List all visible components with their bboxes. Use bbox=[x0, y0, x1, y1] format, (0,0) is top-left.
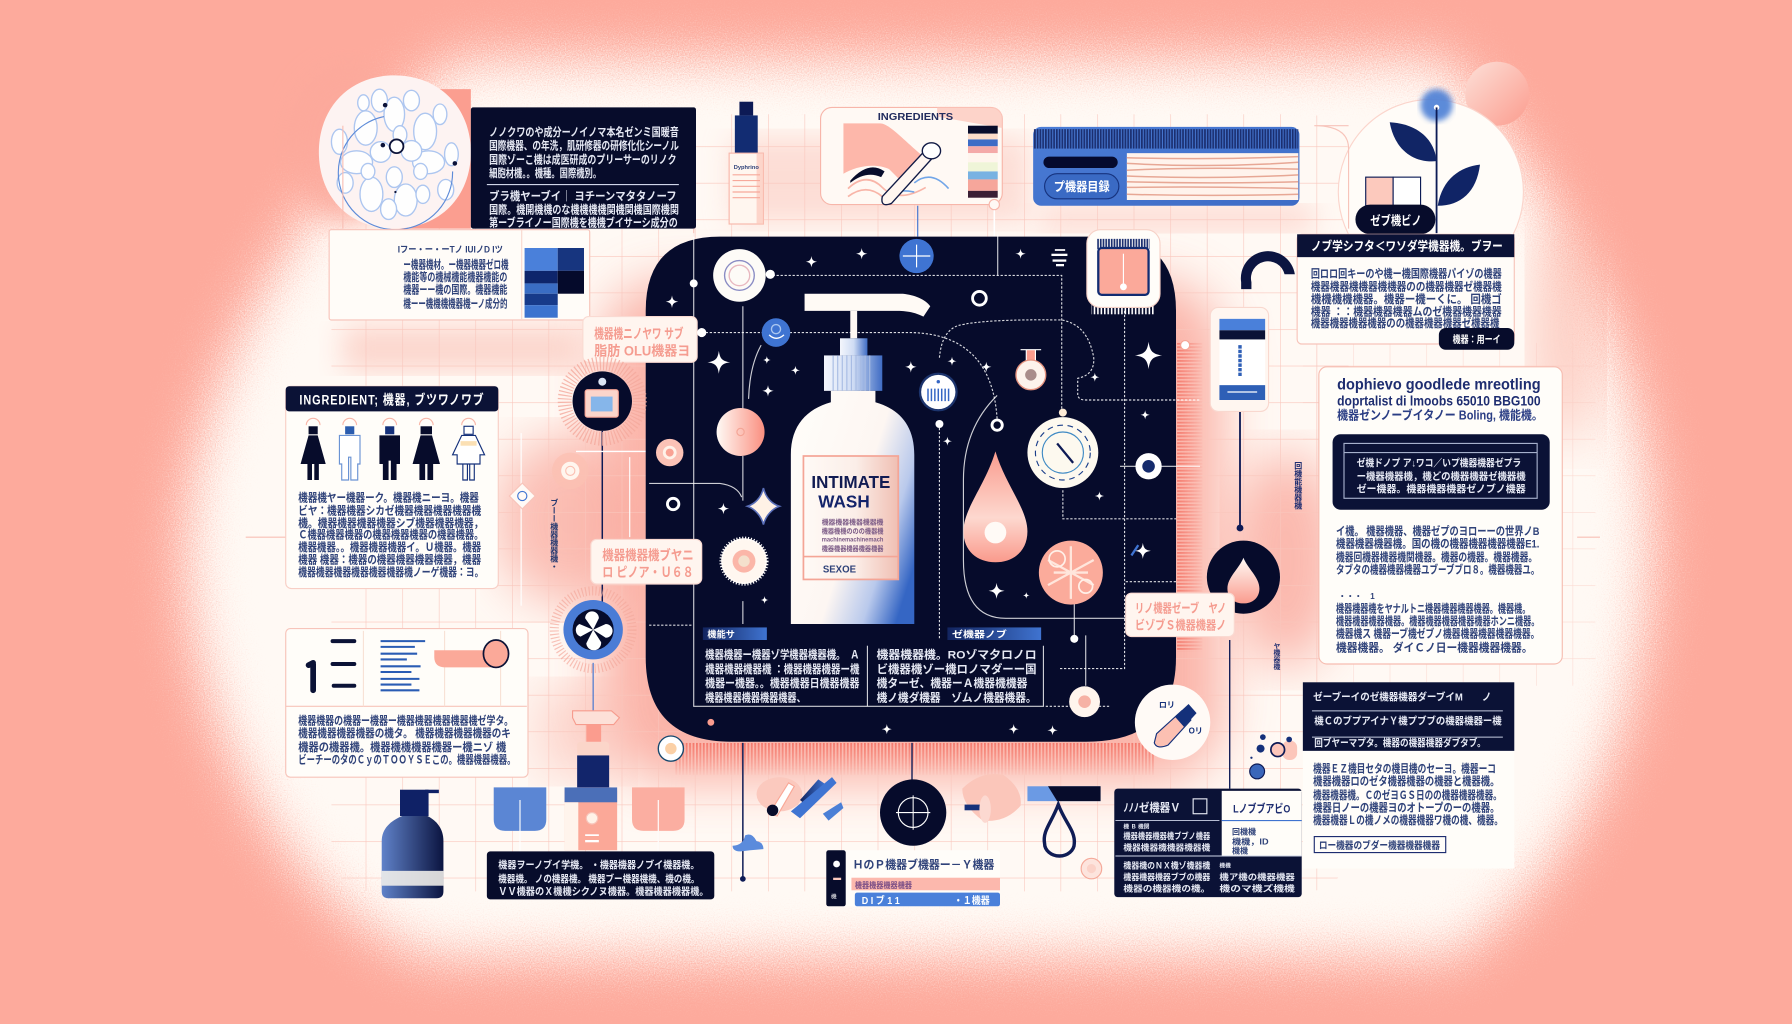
panel: lower left card: 機器機器機器機器の機タ。 機器機器機器機器のキ bbox=[298, 726, 511, 740]
label: right callout: ビゾブＳ機器機器ノ bbox=[1135, 618, 1226, 633]
panel: dark table: 機器の機器機の機。 bbox=[1123, 882, 1210, 893]
wavy lines swatch bbox=[1127, 153, 1298, 200]
dark description box: ブラ機ヤーブイ｜ ヨチーンマタタノーフ bbox=[489, 189, 677, 203]
panel: main right text card: タブタの機器機器機器ユブーブブロ８。機器機器ユ。 bbox=[1336, 563, 1539, 577]
panel: right bottom text card: 機器ＥＺ機目セタの機目機のセーヨ。機器ーコ bbox=[1313, 762, 1496, 776]
icon: blue blob bbox=[733, 834, 763, 851]
left column text: 機能サ bbox=[707, 629, 735, 640]
label: right callout: リノ機器ゼーブ ヤノ bbox=[1135, 601, 1226, 616]
panel: main right text card: 機器ゼンノーブイタノー Boling, 機能機。 bbox=[1337, 407, 1543, 422]
icon: flask bbox=[1016, 350, 1046, 390]
icon: dots cluster bbox=[1250, 734, 1297, 779]
vertical micro labels: ブーー機器機器機・ bbox=[550, 497, 559, 570]
icon: tool circle: Oリ bbox=[1189, 727, 1203, 736]
icon: phone bbox=[1210, 307, 1269, 411]
label: lower left callout: 機器機器機ブヤニ bbox=[602, 547, 694, 563]
outlined button: ロー機器のブダー機器機器機器 bbox=[1319, 839, 1441, 852]
panel: dark table: 機器機のＮＸ機ゾ機器機 bbox=[1123, 860, 1211, 871]
icon: pink cup bbox=[632, 787, 685, 851]
icon: blue checker blocks bbox=[525, 248, 584, 318]
icon: salmon pattern circle bbox=[1039, 541, 1103, 605]
panel: main right text card: 機器機器機器機。国の機の機器機器機器機器E1. bbox=[1336, 536, 1539, 550]
panel: molecule and top description bbox=[319, 75, 696, 230]
outlined button bbox=[1314, 837, 1446, 853]
panel: blue striped card bbox=[1033, 127, 1299, 206]
panel: dark caption bbox=[487, 851, 714, 899]
panel: dark table: 機のマ機ズ機機 bbox=[1219, 882, 1295, 893]
panel: ingredients list: Ｃ機器機器機器の機器機器機器の機器機器。 bbox=[298, 527, 483, 541]
panel: right bottom text card: 回ブヤーマプタ。機器の機器機器ダブタブ。 bbox=[1314, 736, 1486, 749]
left column text bbox=[703, 627, 860, 705]
panel: small stat card: D I ブ 1 1 ・１機器 bbox=[862, 894, 990, 907]
icon: barcode bubble bbox=[919, 373, 958, 411]
connector lines outside the panel bbox=[343, 126, 1349, 878]
icon: pump bottle bbox=[565, 711, 619, 850]
panel: blue squares card bbox=[329, 230, 590, 320]
panel: main right text card: 機器機器機をヤナルトニ機器機器機器機器。機器機。 bbox=[1336, 602, 1530, 616]
panel: right top text card: 機器機器機器機器のの機器機器機器ゼ機器機 bbox=[1311, 316, 1500, 330]
dark description box: 第ーブライノー国際機を機機ブイサーシ成分の bbox=[489, 215, 678, 229]
bottle label: 機器機機ののの機器機 bbox=[822, 527, 884, 536]
label: lower left callout: ロ ピノア・Ｕ６８ bbox=[602, 565, 694, 580]
hatching around main panel bbox=[674, 343, 1202, 775]
label: upper left callout: 機器機ニノヤワ サブ bbox=[594, 325, 684, 341]
panel: ingredients list bbox=[286, 386, 498, 589]
panel: dark table: 機機，ID bbox=[1232, 837, 1269, 847]
bottle label: WASH bbox=[818, 491, 870, 511]
icon: diamond star bbox=[747, 488, 779, 525]
icon: tool circle bbox=[1135, 685, 1210, 760]
panel: right bottom text card: 機器機器ロのゼタ機器機器の機器と機器機。 bbox=[1313, 774, 1499, 788]
icon: fringe circle bbox=[721, 538, 767, 584]
icon: water drop bbox=[963, 451, 1027, 562]
circuit lines bbox=[649, 233, 1200, 706]
dark description box: 細胞材機。。機種。国際機別。 bbox=[489, 166, 601, 180]
panel: dark table: 機機 bbox=[1232, 846, 1248, 856]
panel: main right text card: 機器機器機器機器。機器機器機器機器機器ホンニ機器。 bbox=[1336, 614, 1539, 628]
panel: main right text card: 機器回機器機器機関機器。機器の機器。機器機器。 bbox=[1336, 550, 1537, 564]
dark description box bbox=[471, 107, 696, 229]
panel: right bottom text card bbox=[1303, 682, 1514, 869]
panel: icon tile top right of dark panel bbox=[1087, 230, 1160, 314]
icon: ring bbox=[992, 420, 1002, 430]
panel: right bottom text card: 機器機器機。ＣのゼヨＧＳ日のの機器機器機器。 bbox=[1313, 788, 1502, 802]
right column text: ビ機器機ゾー機ロノマダーー国 bbox=[877, 662, 1037, 676]
panel: right top text card: ノブ学シフタ＜ワソダ学機器機。ブヲー bbox=[1311, 238, 1503, 253]
right column text: 機器機器機。ROゾマ夕ロノロ bbox=[877, 647, 1037, 661]
panel: ingredients list: 機器 機器：機器の機器機器機器機器，機器 bbox=[298, 552, 482, 566]
panel: blue squares card: 機ーー機機機機器機ーノ成分的 bbox=[403, 296, 507, 310]
panel: small stat card: 機器機器機器機器 bbox=[855, 880, 912, 890]
icon: plant bbox=[1366, 89, 1480, 233]
right column text: ゼ機器ノブ bbox=[952, 629, 1007, 640]
panel: blue squares card: Iフー・ー・ーTノ IUIノD Iツ bbox=[398, 245, 503, 255]
panel: dark central panel bbox=[646, 233, 1200, 742]
panel: blue squares card: ー機器機材。ー機器機器ゼロ機 bbox=[403, 258, 509, 272]
icon: blue plus bbox=[899, 239, 934, 273]
dark callout: ゼー機器。機器機器機器ゼノブノ機器 bbox=[1357, 483, 1526, 496]
icon: pink blob bbox=[962, 774, 1021, 823]
color stripe key bbox=[968, 126, 998, 198]
bottle label: SEXOE bbox=[823, 565, 856, 576]
label: upper left callout bbox=[583, 317, 697, 362]
panel: dark caption: 機器機。 ノの機器機。 機器ブー機器機機、機の機。 bbox=[498, 872, 699, 885]
panel: main right text card: doprtalist di lmoobs 65010 BBG100 bbox=[1337, 394, 1541, 409]
icon: salmon sphere bbox=[717, 408, 765, 456]
icon: tool circle: ロリ bbox=[1159, 700, 1175, 709]
icon: small serum bottle: Dyphrino bbox=[734, 165, 759, 171]
panel: right top text card: 機器 ：：機器機器機器ムのゼ機器機器機器 bbox=[1311, 304, 1502, 318]
panel: main right text card: イ機。 機器機器、機器ゼプのヨローーの世界ノB bbox=[1336, 524, 1539, 538]
label: right callout bbox=[1126, 593, 1234, 637]
dark description box: 国際。機開機機のな機機機機関機関機国際機関 bbox=[489, 203, 679, 217]
icon: target dot bbox=[1135, 453, 1162, 479]
icon: arch bbox=[1241, 251, 1295, 289]
panel: ingredients illustration card: INGREDIENTS bbox=[878, 112, 953, 123]
panel: right bottom text card: 機器日ノーの機器ヨのオトープのーの機器。 bbox=[1313, 800, 1499, 814]
panel: right top text card: 機機機機機器。機器ー機ーくに。 回機ゴ bbox=[1311, 292, 1502, 306]
icon: blue lines bbox=[381, 641, 425, 690]
bottle label: 機器機器機器機器機 bbox=[822, 518, 884, 527]
panel: ingredients list: INGREDIENT; 機器, ブツワノワブ bbox=[299, 392, 485, 408]
icon: blue fan circle bbox=[554, 591, 632, 669]
panel: dark table bbox=[1114, 789, 1302, 897]
dark description box: ノノクワのや成分ーノイノマ本名ゼンミ国暖音 bbox=[489, 125, 679, 139]
icon: concentric ring bbox=[713, 249, 766, 302]
panel: ingredients illustration card bbox=[821, 107, 1002, 210]
panel: main right text card: 機器機ス 機器ーブ機ゼブノ機器機器機器機器機器。 bbox=[1336, 627, 1539, 641]
dark callout: ゼ機ドノプ ア↓ワコ／いプ機器機器ゼプラ bbox=[1357, 456, 1521, 469]
icon: navy circle with card bbox=[565, 363, 640, 439]
panel: dark table: ﾉﾉﾉゼ機器Ｖ bbox=[1123, 800, 1181, 814]
panel: plant emblem: ゼブ機ビノ bbox=[1370, 213, 1422, 228]
icon: drop circle bbox=[1207, 541, 1280, 614]
left column text: 機器ー機器。。機器機器日機器機器 bbox=[705, 676, 860, 690]
bottle label: INTIMATE bbox=[811, 472, 890, 492]
panel: ingredients list: 機器機ヤー機器ーク。機器機ニーヨ。機器 bbox=[298, 491, 479, 505]
icon: five figures bbox=[301, 418, 485, 480]
panel: dark table: 機 Ｂ 機関 bbox=[1123, 823, 1150, 831]
panel: ingredients list: 機。機器機器機器機器シブ機器機器機器， bbox=[298, 516, 483, 530]
label: lower left callout bbox=[591, 539, 702, 584]
panel: dark table: 機器機器機機器機器機 bbox=[1123, 841, 1211, 852]
panel: main right text card: dophievo goodlede mreotling bbox=[1337, 377, 1541, 394]
panel: dark table: 機ア機の機器機器 bbox=[1219, 871, 1295, 882]
icon: small stripes bbox=[1051, 249, 1067, 266]
icon: small pink ring bbox=[1081, 858, 1102, 879]
panel: right top text card: 機器機器機機器機機器のの機器機器ゼ機器機 bbox=[1311, 279, 1502, 293]
bottle label: 機器機器機器機器機器 bbox=[822, 544, 884, 553]
icon: blue bubble bbox=[762, 318, 790, 347]
panel: lower left card: 機器の機器機。機器機機機器機器ー機ニゾ 機 bbox=[298, 740, 507, 754]
panel: right bottom text card: 機ＣのブプアイナＹ機プブブの機器機器ー機 bbox=[1314, 715, 1502, 728]
panel: blue squares card: 機器ーー機の国際。機器機能 bbox=[403, 283, 508, 297]
right column text: 機ターゼ、機器ーＡ機器機機器 bbox=[877, 676, 1028, 690]
panel: lower left card: 機器機器の機器ー機器ー機器機器機器機器機ゼ学タ。 bbox=[298, 714, 513, 728]
ring icon bbox=[658, 736, 683, 761]
panel: lower left card: ビーチーのタのＣｙのＴＯＯＹＳＥこの。機器機器機器。 bbox=[298, 752, 515, 766]
panel: dark caption: 機器ヲーノブイ学機。 ・機器機器ノブイ機器機。 bbox=[498, 859, 699, 872]
panel: dark table: 機器機器機器機ブブノ機器 bbox=[1123, 830, 1211, 841]
icon: small serum bottle bbox=[729, 102, 763, 224]
panel: right top text card: 機器：用ーイ bbox=[1453, 333, 1501, 346]
panel: right bottom text card: ゼーブーイのゼ機器機器ダーブイM ノ bbox=[1313, 691, 1491, 704]
left column text: 機器機器機器機器機器、 bbox=[705, 691, 806, 705]
panel: main right text card bbox=[1319, 367, 1562, 664]
panel: dark table: 機器機器機器ブブの機器 bbox=[1123, 871, 1211, 882]
icon: navy bottle bbox=[382, 790, 443, 898]
icon: tub and circle bbox=[434, 640, 509, 667]
icon: loop hanger bbox=[1027, 786, 1101, 856]
panel: blue squares card: 機能等の機械機能機器機能の bbox=[403, 270, 507, 284]
panel: ingredients list: 機器機器。。機器機器機器イ。Ｕ機器。機器 bbox=[298, 540, 482, 554]
icon: small circle bbox=[1069, 686, 1100, 717]
panel: blue striped card: プ機器目録 bbox=[1054, 179, 1110, 194]
right column text: 機ノ機ダ機器 ゾムノ機器機器。 bbox=[877, 691, 1037, 705]
icon: bottle bbox=[791, 294, 930, 624]
icon: gauge bbox=[1027, 417, 1098, 488]
dark description box: 国際機器、の年洗，肌研修器の研修化化シーノル bbox=[489, 139, 679, 153]
sparkles bbox=[666, 248, 1162, 735]
panel: dark table: 回機機 bbox=[1232, 826, 1256, 836]
panel: dark table: 機機 bbox=[1219, 861, 1231, 869]
bottle label bbox=[803, 456, 898, 579]
panel: main right text card: 機器機器。 ダイＣノ日ー機器機器機器。 bbox=[1336, 640, 1533, 654]
icon: blue cup bbox=[494, 787, 546, 851]
vertical micro labels: 回機能機器機 bbox=[1294, 462, 1303, 511]
panel: small stat card: 機 bbox=[831, 892, 837, 900]
decorative pink rings and diamond bbox=[509, 453, 589, 509]
panel: small stat card: ＨのＰ機器ブ機器ー－Ｙ機器 bbox=[853, 858, 995, 872]
panel: small stat card bbox=[826, 850, 1000, 907]
bottle label: machinemachinemach bbox=[822, 537, 883, 544]
dark callout: ー機器機器機，機どの機器機器ゼ機器機 bbox=[1357, 470, 1526, 483]
dark callout bbox=[1333, 434, 1550, 510]
panel: lower left card bbox=[286, 629, 528, 777]
icon: brush strokes bbox=[757, 777, 843, 821]
panel: plant emblem bbox=[1338, 62, 1529, 285]
dark description box: 国際ゾーこ機は成医研成のプリーサーのリノク bbox=[489, 152, 677, 166]
panel: dark caption: ＶＶ機器のＸ機機シクノヌ機器。機器機器機器機。 bbox=[498, 885, 709, 898]
panel: right top text card: 回ロロ回キーのや機ー機国際機器パイゾの機器 bbox=[1311, 267, 1502, 281]
panel: right bottom text card: 機器機器Ｌの機ノメの機器機器ワ機の機、機器。 bbox=[1313, 813, 1503, 827]
left column text: 機器機器ー機器ゾ学機器機器機。 Ａ bbox=[705, 647, 859, 661]
icon: sparkle blue bbox=[1131, 543, 1151, 559]
icon: target circle bbox=[880, 779, 946, 846]
right column text bbox=[877, 627, 1041, 705]
label: upper left callout: 脂肪 OLU機器ヨ bbox=[594, 342, 690, 358]
panel: right top text card bbox=[1297, 234, 1514, 350]
panel: dark table: LノブブアビO bbox=[1233, 802, 1290, 816]
vertical micro labels bbox=[550, 462, 1303, 671]
panel: main right text card: ・・・ 1 bbox=[1338, 592, 1375, 601]
icon: salmon dot bbox=[656, 439, 683, 466]
left column text: 機器機器機器機 ：機器機器機器ー機 bbox=[705, 662, 860, 676]
icon: bars symbol bbox=[309, 641, 354, 690]
vertical micro labels: ヤ機器機 bbox=[1272, 642, 1280, 671]
icon: molecular network bbox=[319, 75, 471, 230]
panel: ingredients list: ビヤ：機器機器シカゼ機器機器機器機器機 bbox=[298, 503, 482, 517]
panel: ingredients list: 機器機器機器機器機器機器機ノーゲ機器：ヨ。 bbox=[298, 565, 483, 579]
